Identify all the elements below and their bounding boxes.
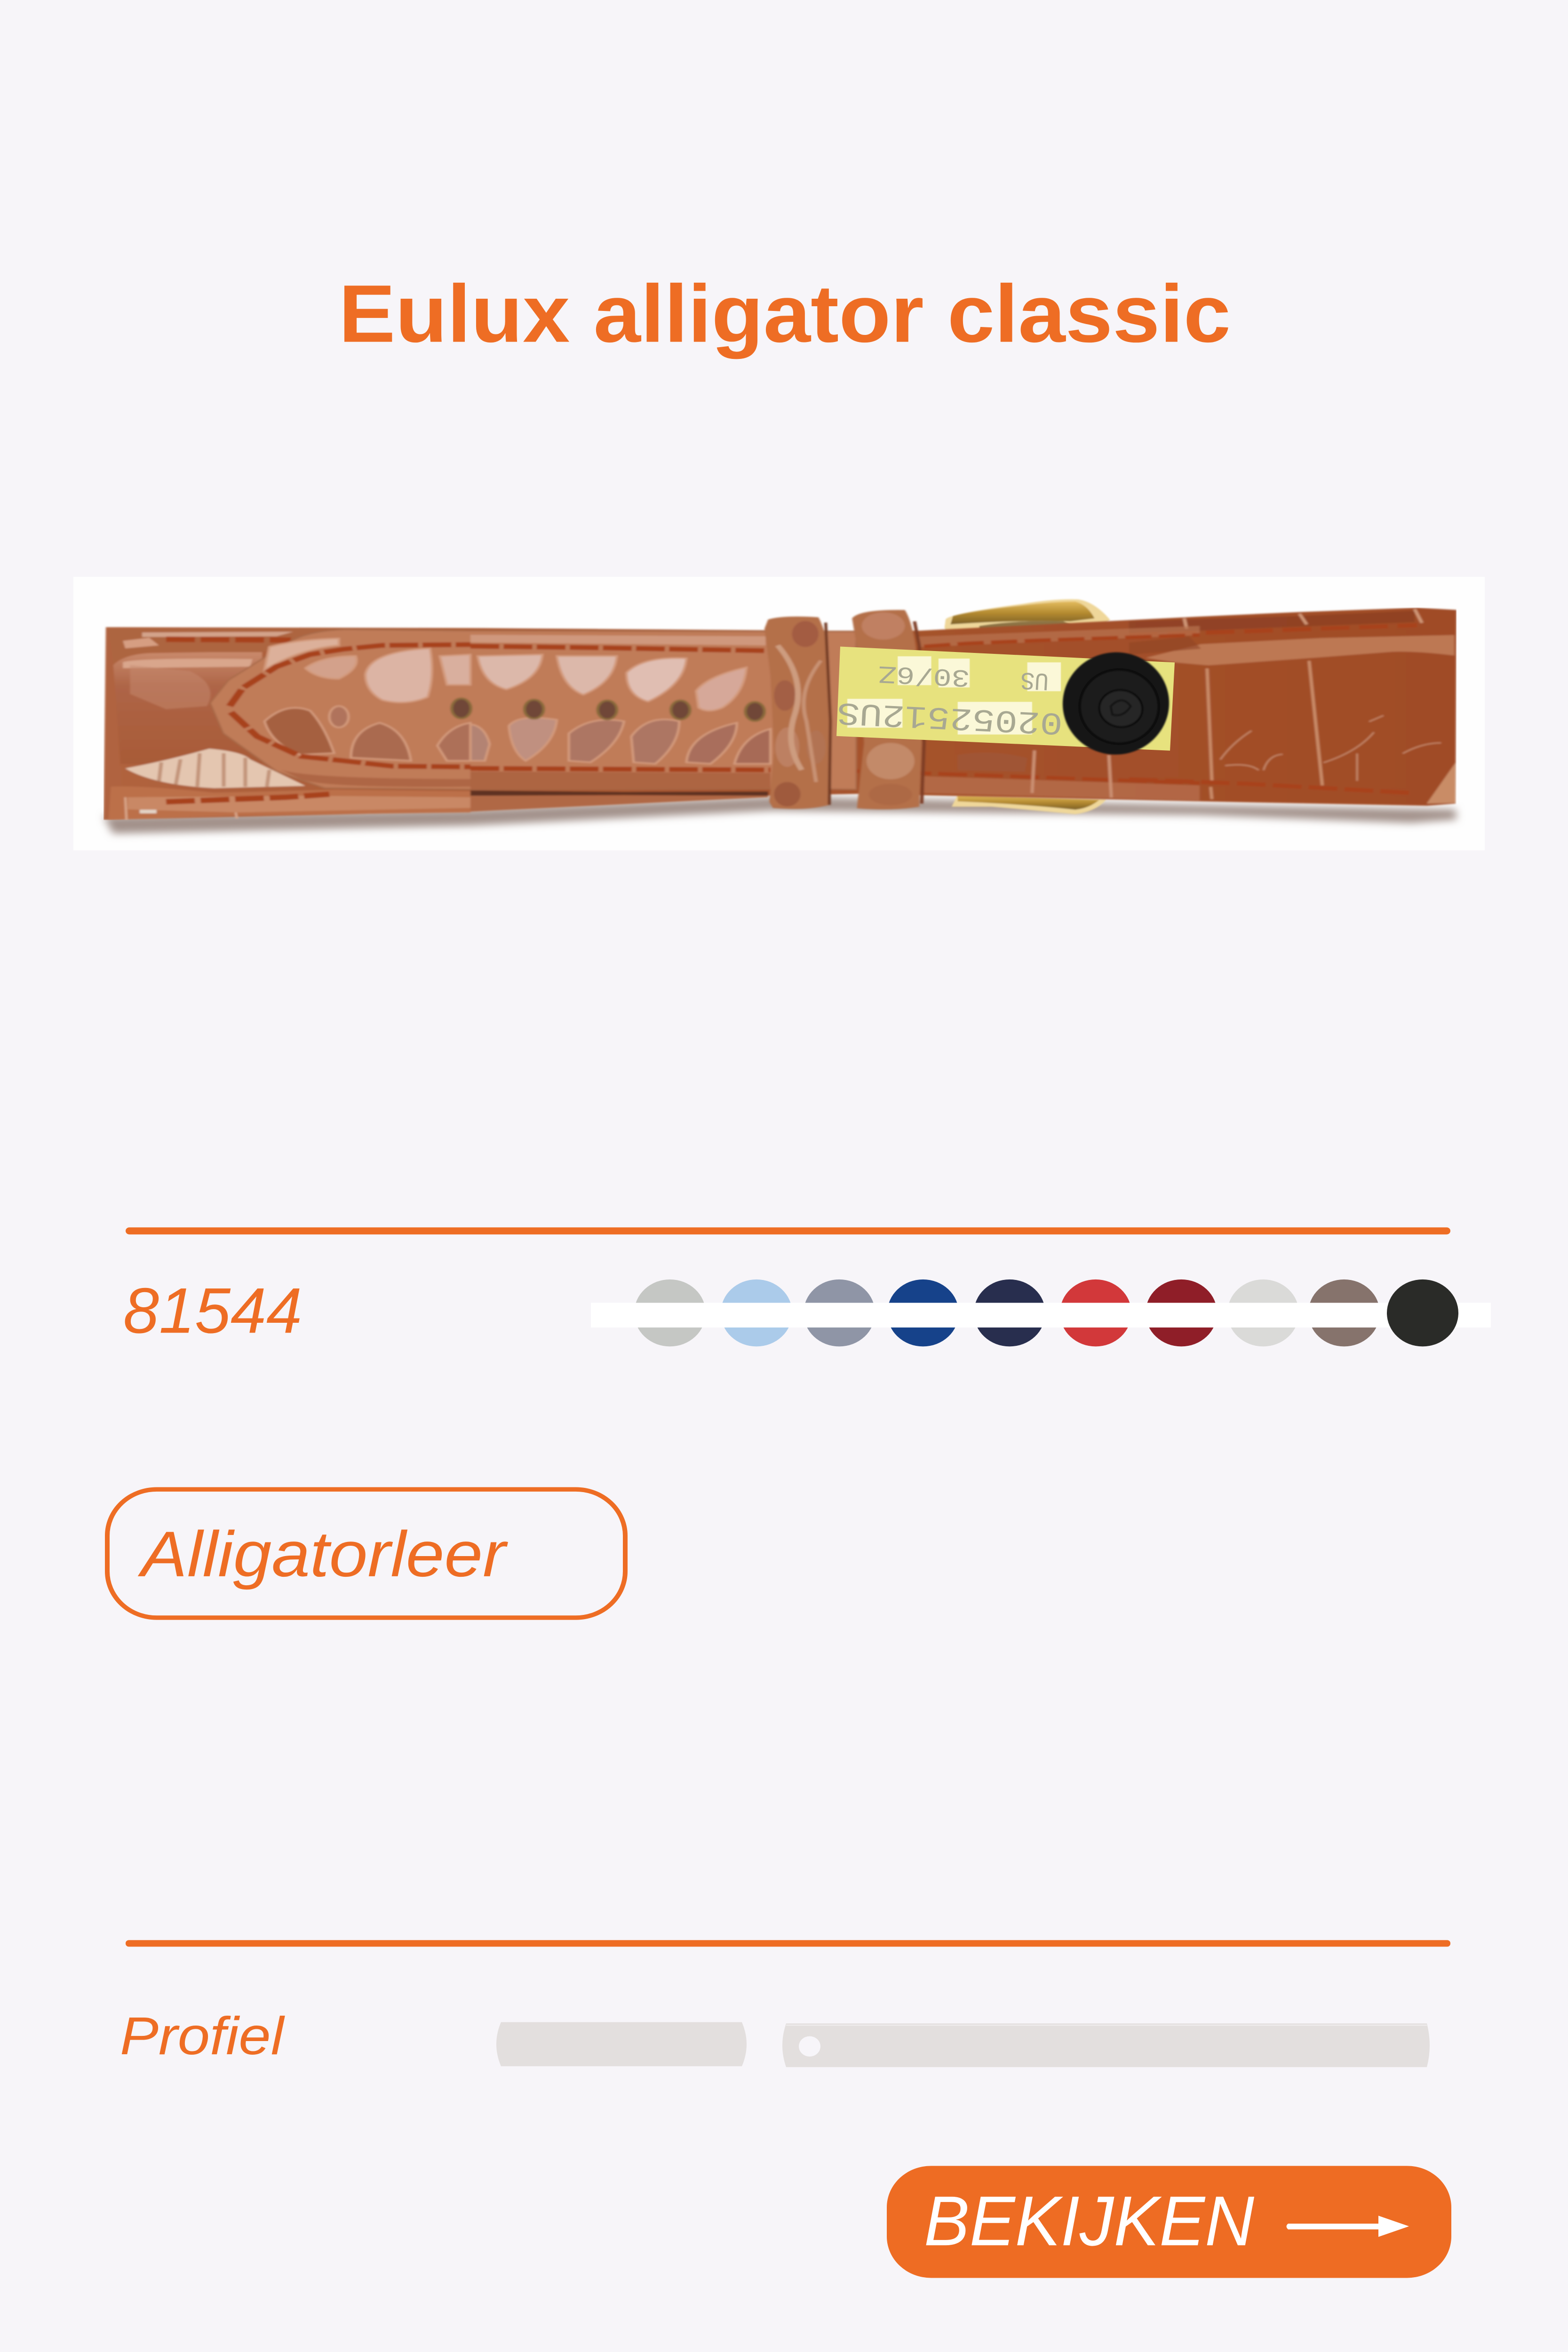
material text: Alligatorleer: [138, 1518, 508, 1590]
first keeper loop: [764, 617, 830, 809]
button: bekijken: [887, 2166, 1451, 2278]
underside gap: [470, 790, 768, 796]
colour swatches: [591, 1279, 1491, 1346]
profile block short: [496, 2022, 747, 2066]
material tag: [107, 1489, 625, 1618]
sticker text, upside down: [836, 659, 1064, 740]
second keeper loop: [852, 610, 924, 810]
divider top: [126, 1227, 1450, 1234]
sticker text, upside down: US: [1020, 665, 1050, 694]
price label sticker: [836, 646, 1175, 751]
article number: 81544: [123, 1274, 302, 1346]
divider bottom: [126, 1940, 1450, 1947]
arrow: [1286, 2216, 1409, 2237]
sticker text, upside down: 30/6Z: [877, 659, 971, 691]
tongue with alligator scales: [210, 629, 856, 789]
strap holes: [525, 700, 764, 721]
photo white backdrop: [73, 577, 1485, 850]
black swatch: [1387, 1279, 1458, 1346]
buckle: [945, 599, 1110, 814]
button text: BEKIJKEN: [924, 2182, 1255, 2260]
left under-strap details: [109, 628, 470, 820]
middle strap details: [830, 626, 1200, 801]
black plastic button: [1056, 646, 1176, 761]
title: Eulux alligator classic: [339, 268, 1231, 359]
right strap details: [1129, 609, 1456, 803]
sticker text, upside down: 02052512US: [836, 694, 1064, 740]
white band across swatches: [591, 1303, 1491, 1327]
sticker print patches: [847, 656, 1061, 734]
swatch circles: [634, 1279, 1380, 1346]
product photo: alligator watch strap: [73, 577, 1485, 850]
profile diagram: [496, 2022, 1430, 2067]
profile label: Profiel: [120, 2006, 285, 2066]
strap shadow: [103, 796, 1457, 834]
profile block long with hole: [782, 2024, 1430, 2067]
strap body: [103, 608, 1457, 820]
